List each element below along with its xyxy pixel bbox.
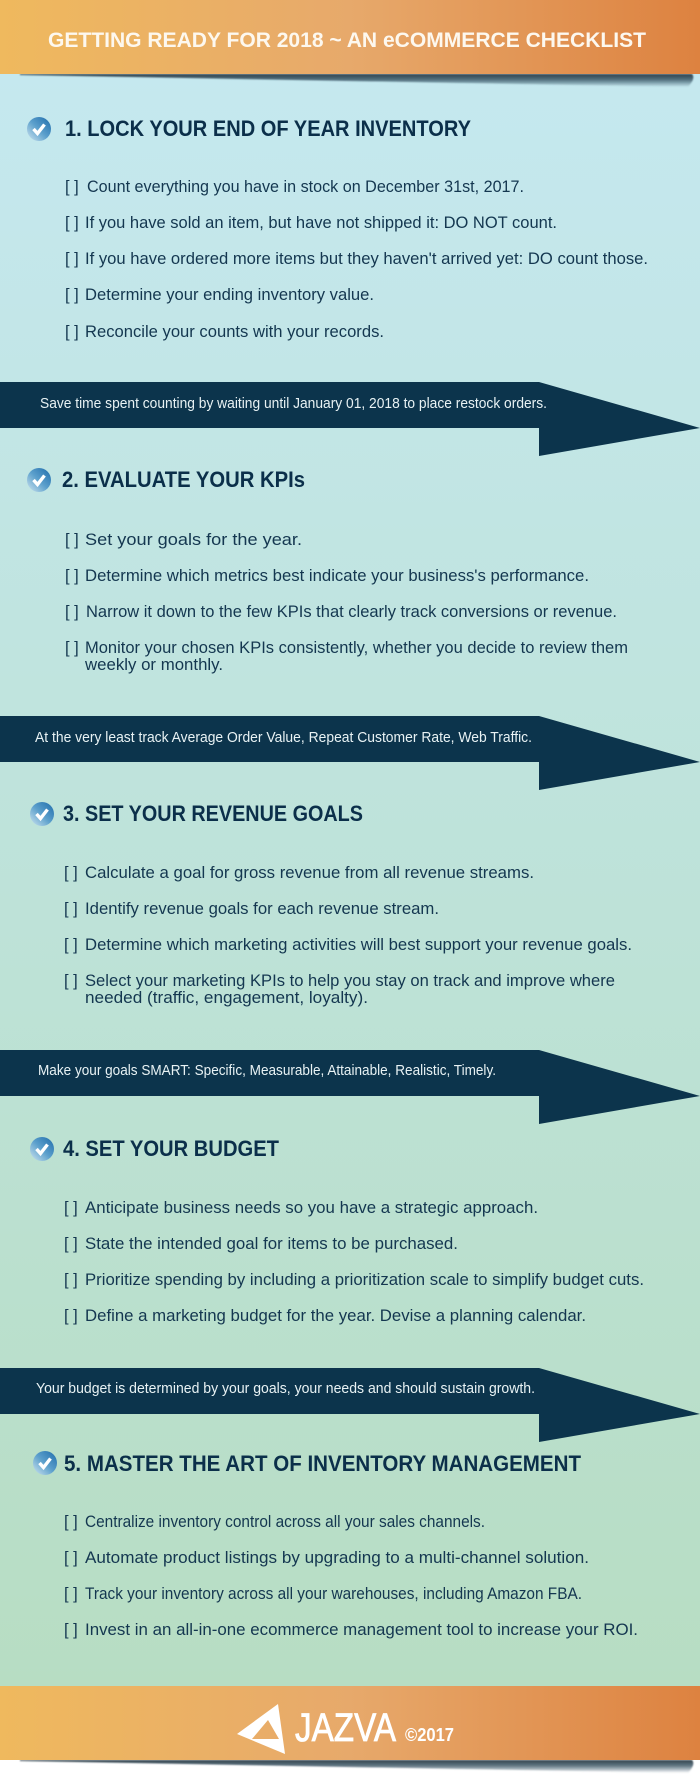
checklist 1: If you have ordered more items but they haven't arrived yet: DO count those. <box>85 250 648 268</box>
checklist 1: [ ] <box>65 214 79 232</box>
checklist 3: Calculate a goal for gross revenue from all revenue streams. <box>85 864 534 882</box>
checklist 2: [ ] <box>65 603 79 621</box>
arrow callout 2 <box>0 716 700 790</box>
copyright: ©2017 <box>405 1725 454 1745</box>
checklist 2: [ ] <box>65 567 79 585</box>
icon: Jazva logo triangle <box>237 1704 285 1754</box>
checklist 4: [ ] <box>64 1307 78 1325</box>
heading 5: 5. MASTER THE ART OF INVENTORY MANAGEMENT <box>64 1451 582 1476</box>
icon: check badge 5 <box>33 1451 57 1475</box>
heading 2: 2. EVALUATE YOUR KPIs <box>62 467 305 492</box>
checklist 5: [ ] <box>64 1585 78 1603</box>
checklist 3: [ ] <box>64 900 78 918</box>
arrow callout 3 <box>0 1050 700 1124</box>
checklist 2: [ ] <box>65 531 79 549</box>
heading 3: 3. SET YOUR REVENUE GOALS <box>63 801 363 826</box>
checklist 4: [ ] <box>64 1235 78 1253</box>
checklist 4 <box>64 1199 644 1325</box>
arrow callout 1: Save time spent counting by waiting until January 01, 2018 to place restock orders. <box>40 396 547 412</box>
panel: section 2 KPIs <box>27 467 628 674</box>
checklist 5: Centralize inventory control across all your sales channels. <box>85 1513 485 1531</box>
checklist 3: Identify revenue goals for each revenue stream. <box>85 900 439 918</box>
checklist 2 <box>65 531 628 674</box>
panel: section 3 revenue goals <box>30 801 632 1007</box>
heading 4: 4. SET YOUR BUDGET <box>63 1136 280 1161</box>
checklist 3: Select your marketing KPIs to help you stay on track and improve where <box>85 972 615 990</box>
checklist 3: [ ] <box>64 864 78 882</box>
checklist 2: Set your goals for the year. <box>85 531 302 549</box>
arrow callout 1 <box>0 382 700 456</box>
checklist 1: [ ] <box>65 250 79 268</box>
checklist 4: Anticipate business needs so you have a strategic approach. <box>85 1199 538 1217</box>
checklist 1: [ ] <box>65 178 79 196</box>
icon: check badge 2 <box>27 468 51 492</box>
checklist 3 <box>64 864 632 1007</box>
checklist 2: Narrow it down to the few KPIs that clearly track conversions or revenue. <box>86 603 617 621</box>
checklist 4: [ ] <box>64 1271 78 1289</box>
checklist 1 <box>65 178 648 341</box>
checklist 3: [ ] <box>64 936 78 954</box>
checklist 4: Define a marketing budget for the year. Devise a planning calendar. <box>85 1307 586 1325</box>
checklist 1: [ ] <box>65 286 79 304</box>
checklist 4: State the intended goal for items to be purchased. <box>85 1235 458 1253</box>
checklist 5: Invest in an all-in-one ecommerce management tool to increase your ROI. <box>85 1621 638 1639</box>
footer banner <box>0 1686 700 1773</box>
checklist 5: [ ] <box>64 1513 78 1531</box>
icon: check badge 4 <box>30 1137 54 1161</box>
checklist 5: Track your inventory across all your warehouses, including Amazon FBA. <box>85 1585 582 1603</box>
panel: section 4 budget <box>30 1136 644 1325</box>
arrow callout 3: Make your goals SMART: Specific, Measurable, Attainable, Realistic, Timely. <box>38 1063 496 1079</box>
checklist 2: Monitor your chosen KPIs consistently, whether you decide to review them <box>85 639 628 657</box>
icon: check badge 3 <box>30 802 54 826</box>
checklist 3: needed (traffic, engagement, loyalty). <box>85 989 368 1007</box>
checklist 1: Count everything you have in stock on December 31st, 2017. <box>87 178 524 196</box>
checklist 2: [ ] <box>65 639 79 657</box>
panel: section 5 inventory management <box>33 1451 638 1639</box>
checklist 1: Reconcile your counts with your records. <box>85 323 384 341</box>
checklist 1: Determine your ending inventory value. <box>85 286 374 304</box>
checklist 2: Determine which metrics best indicate your business's performance. <box>85 567 589 585</box>
checklist 5: Automate product listings by upgrading to a multi-channel solution. <box>85 1549 589 1567</box>
Jazva wordmark: JAZVA <box>295 1706 396 1750</box>
title: GETTING READY FOR 2018 ~ AN eCOMMERCE CHECKLIST <box>48 29 646 52</box>
icon: check badge 1 <box>27 117 51 141</box>
checklist 4: [ ] <box>64 1199 78 1217</box>
checklist 2: weekly or monthly. <box>84 656 223 674</box>
checklist 5 <box>64 1513 638 1639</box>
checklist 5: [ ] <box>64 1621 78 1639</box>
checklist 1: If you have sold an item, but have not shipped it: DO NOT count. <box>85 214 557 232</box>
header banner <box>0 0 700 87</box>
checklist 5: [ ] <box>64 1549 78 1567</box>
panel: section 1 inventory <box>27 116 648 341</box>
checklist 3: Determine which marketing activities will best support your revenue goals. <box>85 936 632 954</box>
arrow callout 4: Your budget is determined by your goals, your needs and should sustain growth. <box>36 1381 535 1397</box>
heading 1: 1. LOCK YOUR END OF YEAR INVENTORY <box>65 116 471 141</box>
arrow callout 2: At the very least track Average Order Value, Repeat Customer Rate, Web Traffic. <box>35 730 532 746</box>
arrow callout 4 <box>0 1368 700 1442</box>
checklist 3: [ ] <box>64 972 78 990</box>
checklist 1: [ ] <box>65 323 79 341</box>
checklist 4: Prioritize spending by including a prioritization scale to simplify budget cuts. <box>85 1271 644 1289</box>
